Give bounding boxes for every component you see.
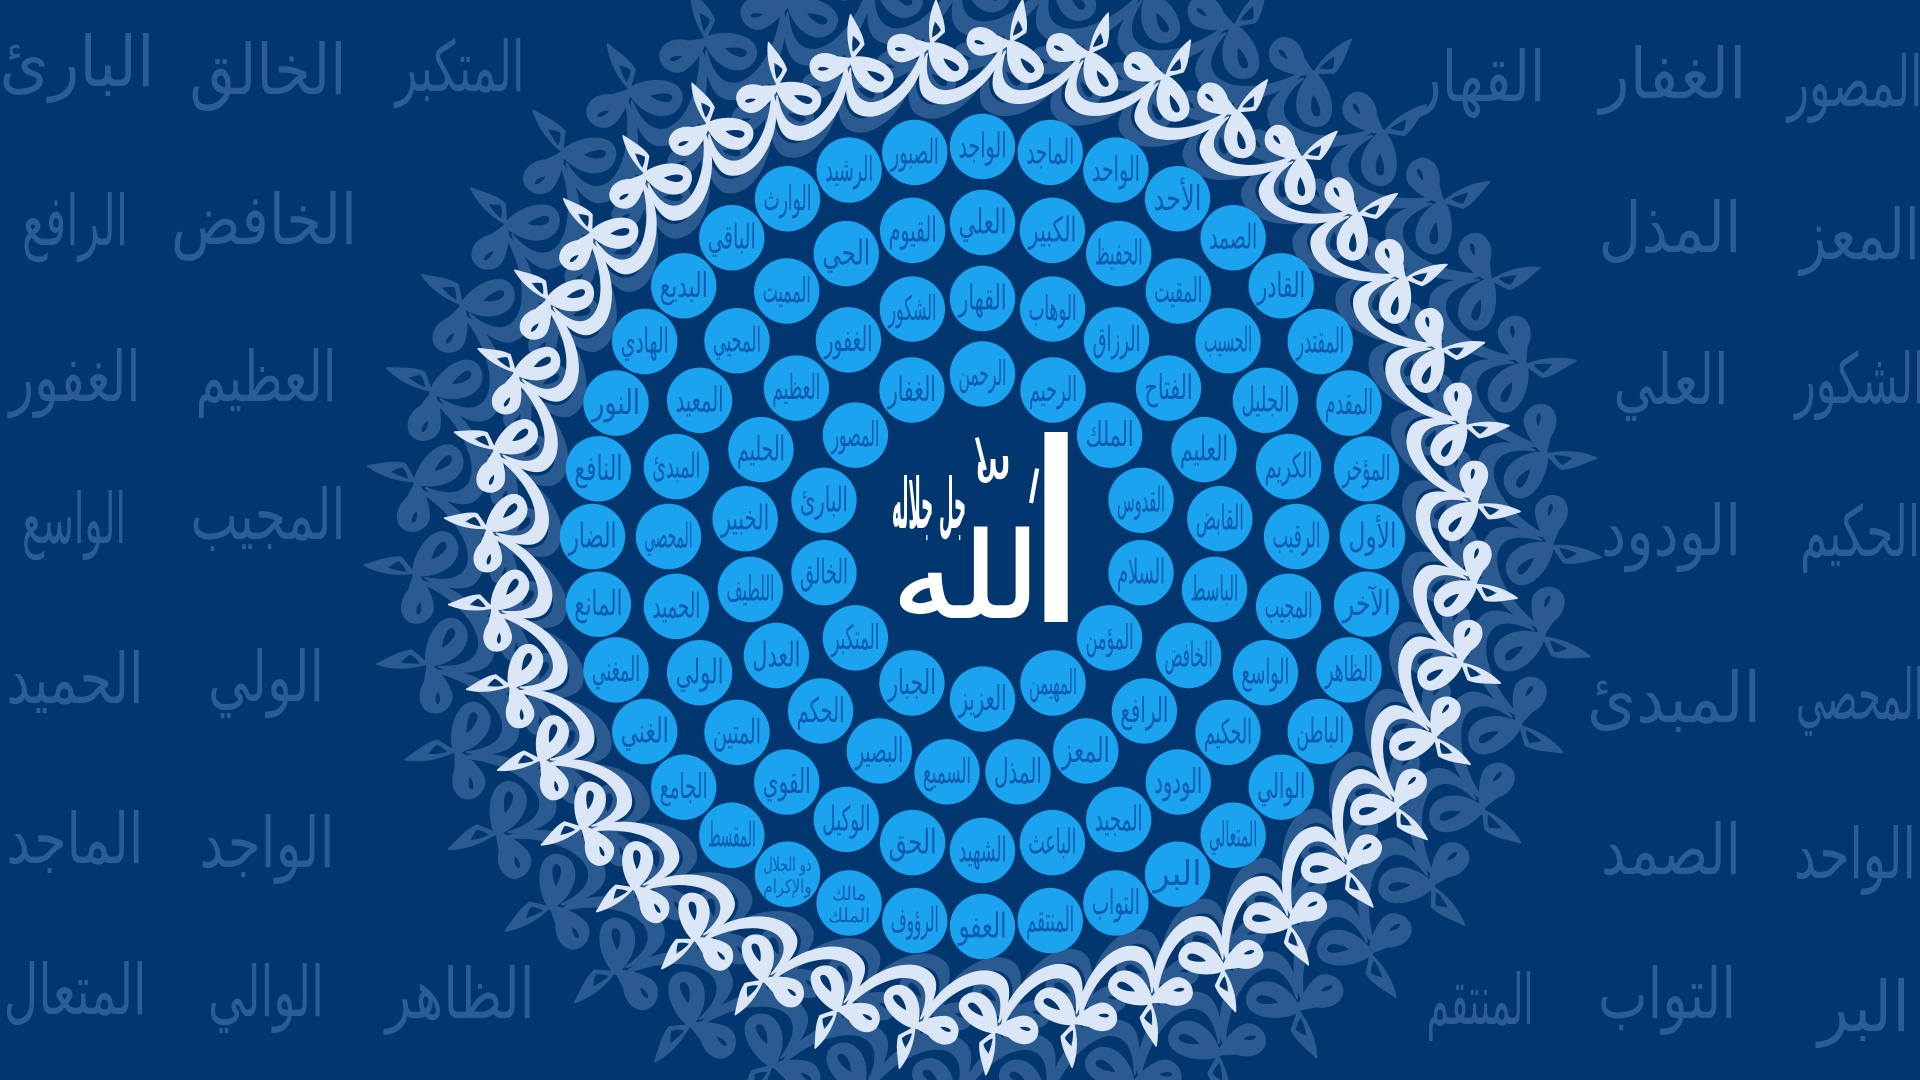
medallion xyxy=(1083,137,1149,203)
medallion xyxy=(950,114,1015,179)
medallion xyxy=(950,666,1015,732)
name: العلي xyxy=(1614,339,1728,422)
medallion xyxy=(1195,308,1261,373)
name: القهار xyxy=(1412,36,1546,118)
name: المبدئ xyxy=(1587,657,1761,739)
medallion: المعز xyxy=(1060,731,1110,771)
medallion: الغفور xyxy=(823,320,872,360)
medallion: الماجد xyxy=(1026,132,1074,172)
medallion: الصبور xyxy=(890,132,939,172)
medallion: الجليل xyxy=(1241,380,1289,420)
name: المتعال xyxy=(4,949,146,1031)
medallion xyxy=(755,166,820,231)
medallion: الظاهر xyxy=(1324,650,1373,690)
medallion xyxy=(754,749,819,815)
medallion xyxy=(1020,198,1085,263)
medallion: الضار xyxy=(567,516,616,556)
medallion: المصور xyxy=(830,415,879,455)
medallion: المهيمن xyxy=(1029,663,1077,703)
medallion xyxy=(879,357,945,423)
medallion: المقتدر xyxy=(1295,322,1344,362)
medallion xyxy=(1020,810,1085,875)
medallion xyxy=(880,276,945,342)
medallion: الحكيم xyxy=(1204,712,1252,752)
medallion xyxy=(1316,370,1382,436)
medallion: الواسع xyxy=(1241,653,1289,693)
medallion xyxy=(1145,166,1210,231)
medallion xyxy=(704,308,770,373)
medallion: الخالق xyxy=(800,553,848,593)
medallion: الوهاب xyxy=(1029,289,1077,329)
medallion xyxy=(1334,436,1399,501)
medallion xyxy=(814,787,879,852)
medallion xyxy=(1020,650,1086,716)
medallion: الآخر xyxy=(1341,584,1391,624)
medallion xyxy=(1200,803,1266,868)
medallion: الباقي xyxy=(708,218,756,258)
medallion: البارئ xyxy=(800,480,848,520)
medallion: السميع xyxy=(923,752,971,792)
outer ring of 36 name medallions xyxy=(560,114,1405,959)
name: المذل xyxy=(1598,187,1742,269)
medallion xyxy=(560,504,625,569)
medallion: البديع xyxy=(660,266,708,306)
medallion: الشكور xyxy=(887,289,936,329)
medallion xyxy=(1233,640,1298,705)
medallion: الجامع xyxy=(660,767,708,807)
medallion: القابض xyxy=(1196,499,1244,539)
medallion: البصير xyxy=(854,731,903,771)
medallion xyxy=(1340,504,1405,569)
medallion: المعيد xyxy=(676,380,724,420)
medallion xyxy=(612,699,677,764)
medallion xyxy=(1112,678,1177,744)
medallion: والإكرام xyxy=(764,876,812,898)
outer ring of 36 name medallions: المتعالي xyxy=(1209,815,1257,855)
medallion xyxy=(914,739,980,805)
medallion: الصمد xyxy=(1209,218,1257,258)
central title: جل جلاله xyxy=(892,463,966,545)
outer ring of 36 name medallions: المقسط xyxy=(708,815,756,855)
medallion xyxy=(1020,276,1085,342)
medallion: الرشيد xyxy=(825,150,873,190)
central word: alif: ا xyxy=(1020,390,1092,681)
medallion xyxy=(1334,572,1399,637)
medallion xyxy=(1195,700,1261,765)
medallion: الغني xyxy=(621,712,669,752)
medallion xyxy=(1256,574,1321,639)
medallion: النور xyxy=(591,383,640,423)
medallion: الرزاق xyxy=(1093,320,1141,360)
medallion xyxy=(1156,623,1221,688)
medallion xyxy=(1200,205,1266,270)
name: الودود xyxy=(1601,490,1741,573)
medallion xyxy=(1288,699,1353,764)
medallion xyxy=(950,894,1015,959)
name: الماجد xyxy=(6,798,144,880)
medallion xyxy=(1018,120,1083,185)
medallion xyxy=(636,504,701,569)
medallion: الرقيب xyxy=(1272,516,1320,556)
medallion: ذو الجلال xyxy=(764,854,812,876)
medallion xyxy=(667,640,732,705)
medallion xyxy=(880,198,945,263)
medallion xyxy=(755,842,820,907)
medallion: القادر xyxy=(1256,266,1305,306)
name: الواجد xyxy=(200,802,334,884)
name: البارئ xyxy=(0,21,154,103)
name: العظيم xyxy=(196,336,336,418)
medallion xyxy=(1086,221,1151,286)
medallion xyxy=(788,678,853,744)
medallion xyxy=(1249,253,1314,319)
medallion: العظيم xyxy=(772,368,820,408)
medallion: الوكيل xyxy=(822,799,870,839)
medallion xyxy=(1018,888,1083,953)
medallion xyxy=(1108,540,1174,605)
central word: right tick mark: ا xyxy=(1023,460,1045,515)
medallion xyxy=(1182,557,1247,622)
medallion: الواحد xyxy=(1092,150,1140,190)
medallion: المجيب xyxy=(1265,586,1313,626)
medallion xyxy=(566,436,631,501)
third ring of 28 name medallions: المحصي xyxy=(644,516,692,556)
medallion: المميت xyxy=(763,271,811,311)
medallion: المؤخر xyxy=(1342,449,1391,489)
medallion xyxy=(583,370,649,436)
medallion xyxy=(712,486,778,551)
medallion xyxy=(847,718,912,784)
medallion xyxy=(1249,754,1314,820)
white ornamental wreath xyxy=(431,0,1535,1080)
medallion: العزيز xyxy=(957,679,1007,719)
medallion xyxy=(644,434,709,499)
medallion xyxy=(1077,402,1142,468)
medallion: الباسط xyxy=(1191,569,1239,609)
medallion: الرؤوف xyxy=(891,901,939,941)
medallion: الوارث xyxy=(764,179,812,219)
medallion: الرحمن xyxy=(958,354,1006,394)
third ring of 28 name medallions: الحسيب xyxy=(1204,321,1252,361)
medallion xyxy=(950,341,1015,407)
medallion: الحق xyxy=(889,823,937,863)
medallion xyxy=(764,355,829,421)
medallion: الشهيد xyxy=(958,830,1006,870)
name: المجيب xyxy=(190,474,346,556)
medallion: الباعث xyxy=(1028,823,1076,863)
medallion xyxy=(1083,870,1149,936)
medallion xyxy=(704,700,770,765)
medallion: الأحد xyxy=(1154,177,1202,219)
medallion: المغني xyxy=(592,650,640,690)
medallion: المجيد xyxy=(1095,799,1143,839)
medallion: الأول xyxy=(1348,514,1396,556)
medallion xyxy=(1256,434,1321,499)
medallion: العليم xyxy=(1180,430,1228,470)
medallion xyxy=(1145,842,1210,907)
medallion xyxy=(791,540,857,605)
medallion: الرحيم xyxy=(1029,370,1077,410)
medallion: القدوس xyxy=(1117,480,1165,520)
name: الولي xyxy=(208,636,324,719)
medallion: الوالي xyxy=(1257,767,1305,807)
medallion: الباطن xyxy=(1296,712,1344,752)
medallion: القيوم xyxy=(889,210,937,250)
medallion: النافع xyxy=(574,449,622,489)
medallion xyxy=(1288,309,1353,374)
medallion: مالك xyxy=(832,883,866,905)
medallion xyxy=(816,870,882,936)
medallion xyxy=(816,137,882,203)
medallion xyxy=(816,307,881,373)
medallion: المتين xyxy=(713,712,761,752)
central word: small alif mark: ا xyxy=(969,430,994,482)
medallion: الكريم xyxy=(1265,447,1313,487)
medallion xyxy=(950,266,1015,331)
medallion xyxy=(612,309,677,374)
second ring of 21 name medallions xyxy=(712,266,1253,805)
medallion xyxy=(880,810,945,875)
medallion: الحكم xyxy=(797,691,845,731)
medallion: الجبار xyxy=(887,663,936,703)
name: المنتقم xyxy=(1426,959,1534,1041)
medallion: الودود xyxy=(1154,762,1202,802)
medallion xyxy=(985,739,1051,805)
medallion xyxy=(754,258,819,324)
medallion xyxy=(644,574,709,639)
name: الغفار xyxy=(1597,33,1746,115)
medallion xyxy=(1077,605,1142,671)
medallion: المبدئ xyxy=(652,447,700,487)
inner faded shadow wreath xyxy=(433,0,1533,1080)
medallion: العفو xyxy=(957,906,1006,946)
medallion xyxy=(1264,504,1329,569)
medallion xyxy=(744,623,809,688)
medallion: الخبير xyxy=(720,499,769,539)
medallion xyxy=(1233,368,1298,433)
name: الخافض xyxy=(171,179,357,261)
name: المتكبر xyxy=(394,26,524,108)
central word: shadda mark: ﹼ xyxy=(977,450,1008,567)
medallion xyxy=(718,557,783,622)
medallion xyxy=(791,468,857,533)
medallion: الفتاح xyxy=(1145,368,1193,408)
medallion: السلام xyxy=(1117,553,1165,593)
medallion: الواجد xyxy=(958,126,1006,166)
medallion: العلي xyxy=(958,202,1006,242)
medallion: المتكبر xyxy=(830,618,879,658)
medallion: الملك xyxy=(828,905,870,927)
medallion: الحميد xyxy=(652,586,700,626)
name: الواسع xyxy=(22,478,126,560)
medallion xyxy=(823,605,888,671)
medallion: العدل xyxy=(752,636,800,676)
central title xyxy=(892,390,1092,681)
third ring of 28 name medallions xyxy=(636,190,1329,883)
medallion xyxy=(1136,355,1201,421)
name: الظاهر xyxy=(383,953,534,1035)
medallion: المحيي xyxy=(713,321,761,361)
medallion xyxy=(1020,357,1086,423)
medallion: المذل xyxy=(994,752,1042,792)
medallion xyxy=(1171,417,1237,482)
name: الوالي xyxy=(208,951,324,1034)
outer faded ornamental wreath xyxy=(300,0,1667,1080)
medallion: الرافع xyxy=(1120,691,1168,731)
name: الغفور xyxy=(7,336,140,418)
name: البر xyxy=(1815,966,1910,1048)
medallion: الخافض xyxy=(1165,636,1213,676)
medallion: الكبير xyxy=(1027,210,1076,250)
medallion xyxy=(1187,486,1253,551)
medallion xyxy=(583,637,649,703)
medallion: المنتقم xyxy=(1026,901,1074,941)
medallion: المؤمن xyxy=(1086,618,1134,658)
medallion xyxy=(699,205,765,270)
medallion: البر xyxy=(1152,854,1202,894)
inner ring of 14 name medallions xyxy=(791,341,1174,732)
medallion xyxy=(950,818,1015,883)
central word: remaining letters: لله xyxy=(892,507,1040,645)
medallion: اللطيف xyxy=(726,569,774,609)
medallion: المانع xyxy=(574,584,622,624)
medallion: الملك xyxy=(1086,415,1134,455)
medallion: القوي xyxy=(763,762,811,802)
medallion xyxy=(1053,718,1118,784)
medallion xyxy=(1316,637,1382,703)
medallion xyxy=(950,190,1015,255)
medallion: الحفيظ xyxy=(1095,234,1143,274)
medallion: الحليم xyxy=(737,430,785,470)
medallion xyxy=(823,402,888,468)
medallion xyxy=(814,221,879,286)
medallion xyxy=(699,803,765,868)
medallion: التواب xyxy=(1092,883,1140,923)
name: الخالق xyxy=(190,29,346,111)
name: الرافع xyxy=(22,180,128,262)
medallion xyxy=(882,120,947,185)
medallion: القهار xyxy=(957,278,1007,318)
name: التواب xyxy=(1598,953,1736,1035)
medallion: المقيت xyxy=(1154,271,1202,311)
medallion xyxy=(1146,258,1211,324)
medallion xyxy=(1084,307,1149,373)
medallion xyxy=(651,754,716,820)
name: الحميد xyxy=(6,638,144,720)
name: الصمد xyxy=(1601,809,1741,891)
medallion: الولي xyxy=(676,653,724,693)
medallion: الهادي xyxy=(621,322,669,362)
medallion xyxy=(667,368,732,433)
medallion: الغفار xyxy=(887,370,936,410)
medallion xyxy=(882,888,947,953)
medallion xyxy=(566,572,631,637)
medallion xyxy=(1108,468,1174,533)
medallion xyxy=(879,650,945,716)
medallion xyxy=(1146,749,1211,815)
medallion: الحي xyxy=(822,234,870,274)
medallion xyxy=(1086,787,1151,852)
medallion: المقدم xyxy=(1325,383,1373,423)
medallion xyxy=(728,417,794,482)
medallion xyxy=(651,253,716,319)
